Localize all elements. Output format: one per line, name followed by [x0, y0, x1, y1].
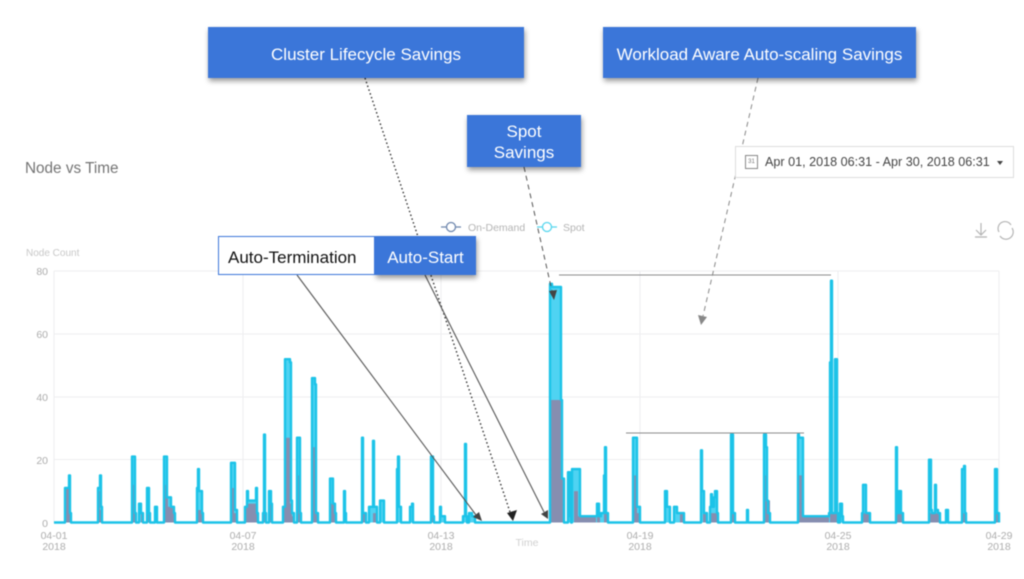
on-demand series area — [65, 400, 999, 522]
x axis labels — [41, 530, 1013, 553]
x axis labels: 04-25 — [825, 530, 852, 542]
y axis title: Node Count — [26, 248, 80, 259]
date range picker — [735, 146, 1014, 178]
arrow: workload aware auto-scaling savings — [698, 78, 758, 325]
x axis labels: 04-13 — [428, 530, 455, 542]
callout: cluster lifecycle savings: Cluster Lifecycle Savings — [271, 44, 461, 64]
x axis labels: 2018 — [231, 541, 255, 553]
callout: spot savings: Savings — [494, 142, 554, 162]
x axis title: Time — [516, 537, 539, 549]
callout: spot savings — [467, 115, 581, 167]
arrow: auto-termination — [297, 275, 482, 521]
x axis labels: 2018 — [826, 541, 850, 553]
y axis labels: 20 — [36, 455, 48, 467]
spot series area — [54, 281, 999, 522]
y axis labels: 40 — [36, 392, 48, 404]
y axis labels: 80 — [36, 266, 48, 278]
spot series outline — [54, 281, 999, 522]
icon: refresh — [998, 222, 1013, 239]
x axis labels: 2018 — [429, 541, 453, 553]
callout: cluster lifecycle savings — [208, 27, 524, 78]
arrow: auto-start — [425, 275, 548, 519]
reference line: autoscaling lower peak — [626, 432, 804, 434]
x axis labels: 2018 — [628, 541, 652, 553]
date range picker: Apr 01, 2018 06:31 - Apr 30, 2018 06:31 — [765, 155, 990, 169]
reference line: autoscaling peak — [559, 274, 831, 276]
legend: Spot — [563, 222, 585, 234]
date range picker: 31 — [748, 159, 755, 165]
callout: auto-termination: Auto-Termination — [228, 248, 357, 266]
icon: download — [975, 223, 987, 237]
chart title: Node vs Time — [25, 160, 119, 177]
callout: auto-start — [375, 236, 476, 275]
arrow: spot savings — [524, 167, 557, 300]
callout: auto-start: Auto-Start — [387, 248, 464, 266]
y axis labels: 60 — [36, 329, 48, 341]
x axis labels: 2018 — [42, 541, 66, 553]
legend — [441, 222, 585, 234]
x axis labels: 04-29 — [986, 530, 1013, 542]
callout: spot savings: Spot — [506, 122, 541, 140]
legend: On-Demand — [468, 222, 525, 234]
x axis labels: 04-07 — [230, 530, 257, 542]
x axis labels: 04-01 — [41, 530, 68, 542]
callout: auto-termination — [218, 236, 375, 275]
y axis labels: 0 — [42, 518, 48, 530]
x axis labels: 2018 — [987, 541, 1011, 553]
arrow: cluster lifecycle savings — [365, 78, 517, 521]
y axis labels — [36, 266, 48, 530]
callout: workload aware auto-scaling savings: Workload Aware Auto-scaling Savings — [617, 44, 902, 64]
callout: workload aware auto-scaling savings — [603, 27, 916, 78]
x axis labels: 04-19 — [627, 530, 654, 542]
